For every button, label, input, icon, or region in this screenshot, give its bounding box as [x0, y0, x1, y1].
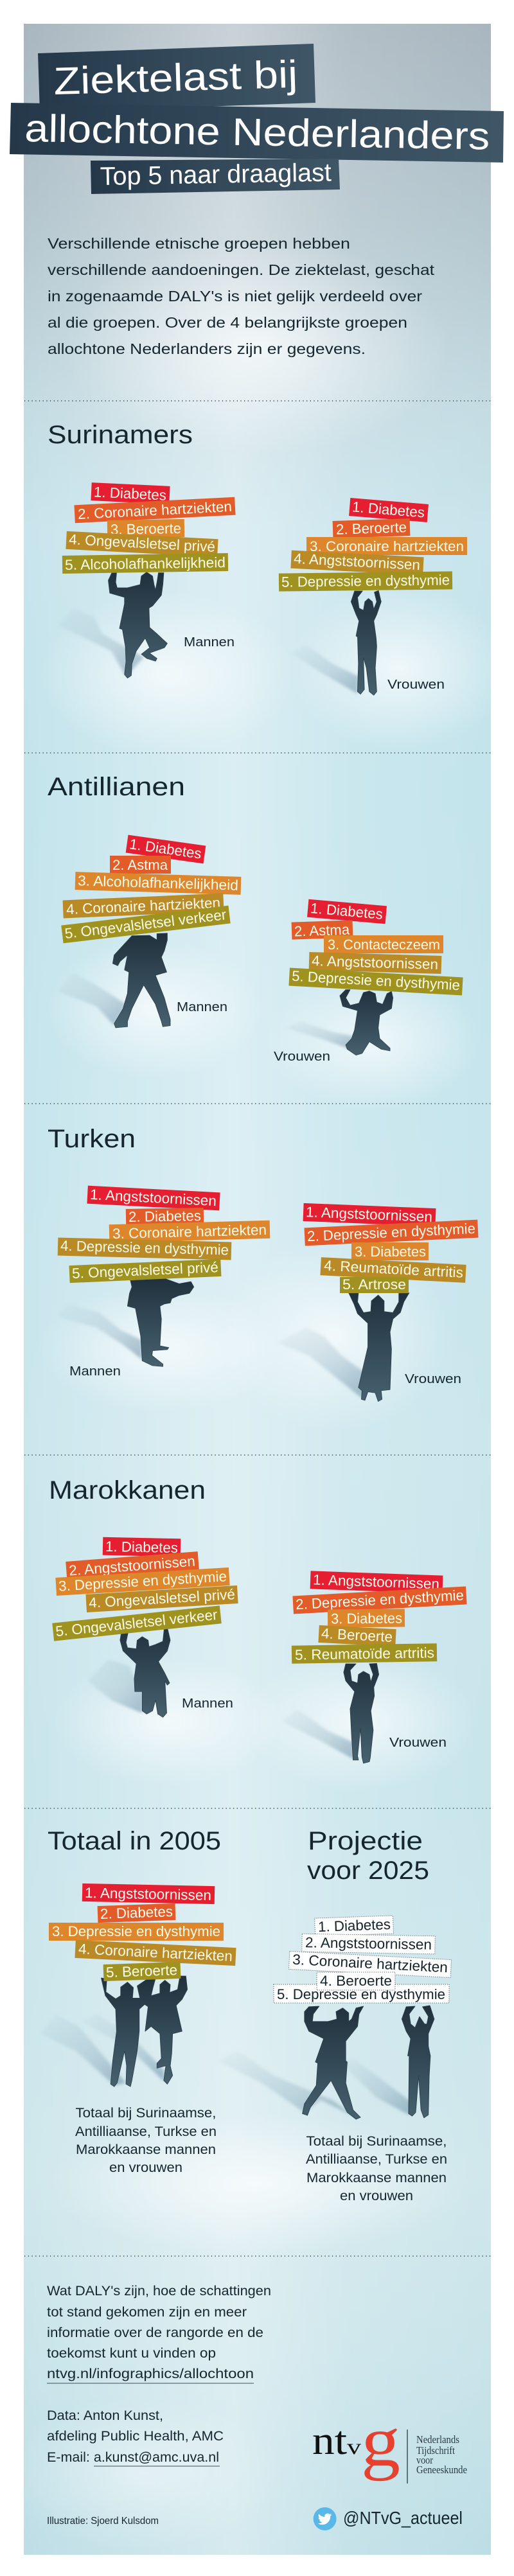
caption: total 2005: en vrouwen: [109, 2160, 182, 2175]
label: 4. Beroerte: 4. Beroerte: [321, 1625, 393, 1645]
panel: Projectie voor 2025: [217, 1827, 452, 2203]
caption: Mannen: Mannen: [69, 1364, 121, 1379]
label: 1. Diabetes: 1. Diabetes: [318, 1916, 391, 1935]
caption: Mannen: Mannen: [184, 635, 235, 649]
figure: man Surinamers: [58, 572, 167, 678]
text: more information: Wat DALY's zijn, hoe de schattingen: [47, 2284, 271, 2298]
label: 4. Depressie en dysthymie: 4. Depressie en dysthymie: [60, 1238, 229, 1258]
label: 2. Diabetes: 2. Diabetes: [100, 1903, 173, 1922]
label: 4. Angststoornissen: 4. Angststoornissen: [312, 953, 438, 973]
heading: Surinamers: Surinamers: [48, 421, 193, 449]
label: 5. Reumatoïde artritis: 5. Reumatoïde artritis: [295, 1645, 434, 1663]
label: 3. Depressie en dysthymie: 3. Depressie en dysthymie: [58, 1568, 227, 1594]
text: data source: afdeling Public Health, AMC: [47, 2429, 224, 2444]
panel: footer: [47, 2284, 467, 2530]
subtitle bar: Top 5 naar draaglast: Top 5 naar draaglast: [100, 159, 332, 191]
figure: woman Turken: [276, 1293, 409, 1402]
label: 1. Angststoornissen: 1. Angststoornissen: [313, 1572, 439, 1592]
caption: projection 2025: en vrouwen: [340, 2189, 413, 2203]
figure: woman Surinamers: [291, 590, 381, 695]
figure: man Turken: [58, 1278, 194, 1366]
label: 3. Coronaire hartziekten: 3. Coronaire hartziekten: [112, 1222, 267, 1242]
panel: Marokkanen: [49, 1476, 467, 1763]
label: 4. Coronaire hartziekten: 4. Coronaire hartziekten: [66, 895, 220, 917]
label: 3. Contacteczeem: 3. Contacteczeem: [328, 937, 440, 953]
caption: projection 2025: [306, 2134, 447, 2203]
label: 5. Artrose: 5. Artrose: [342, 1276, 406, 1292]
caption: total 2005: Totaal bij Surinaamse,: [76, 2106, 216, 2121]
label: 2. Beroerte: 2. Beroerte: [336, 519, 407, 538]
text: more information: ntvg.nl/infographics/allochtoon: [47, 2367, 254, 2381]
logo: ntvg: voor: [416, 2454, 433, 2466]
text: data source: Data: Anton Kunst,: [47, 2408, 163, 2423]
caption: total 2005: [75, 2106, 217, 2175]
label: 3. Depressie en dysthymie: 3. Depressie en dysthymie: [52, 1923, 220, 1939]
title bar: Ziektelast bij: [38, 44, 315, 112]
caption: Vrouwen: Vrouwen: [274, 1049, 330, 1064]
label: 4. Reumatoïde artritis: 4. Reumatoïde artritis: [324, 1257, 464, 1281]
label: 2. Angststoornissen: 2. Angststoornissen: [305, 1934, 432, 1953]
heading: Projectie voor 2025: Projectie: [308, 1827, 423, 1855]
text: data source: [47, 2408, 224, 2466]
text: data source: E-mail: a.kunst@amc.uva.nl: [47, 2450, 219, 2465]
intro text: Verschillende etnische groepen hebben: [48, 235, 350, 252]
figure: man Marokkanen: [87, 1627, 170, 1717]
figure: woman Marokkanen: [282, 1663, 379, 1763]
label: 5. Ongevalsletsel verkeer: 5. Ongevalsletsel verkeer: [55, 1607, 218, 1639]
logo: ntvg: v: [347, 2435, 361, 2459]
label: 3. Beroerte: 3. Beroerte: [111, 520, 181, 538]
text: more information: informatie over de rangorde en de: [47, 2325, 263, 2340]
heading: Marokkanen: Marokkanen: [49, 1476, 206, 1504]
label: 2. Coronaire hartziekten: 2. Coronaire hartziekten: [78, 498, 233, 522]
intro text: [48, 235, 435, 357]
label: 5. Ongevalsletsel verkeer: 5. Ongevalsletsel verkeer: [64, 906, 227, 942]
label: 1. Angststoornissen: 1. Angststoornissen: [85, 1885, 211, 1903]
label: 3. Coronaire hartziekten: 3. Coronaire hartziekten: [292, 1952, 448, 1975]
label: 5. Beroerte: 5. Beroerte: [106, 1962, 177, 1981]
caption: projection 2025: Marokkaanse mannen: [306, 2171, 447, 2185]
intro text: in zogenaamde DALY's is niet gelijk verdeeld over: [48, 288, 422, 304]
heading: Projectie voor 2025: voor 2025: [307, 1857, 429, 1885]
logo: ntvg: Nederlands: [416, 2433, 459, 2446]
label: 5. Depressie en dysthymie: 5. Depressie en dysthymie: [277, 1986, 445, 2002]
text: twitter handle: @NTvG_actueel: [343, 2508, 463, 2528]
label: 2. Depressie en dysthymie: 2. Depressie en dysthymie: [307, 1221, 475, 1244]
label: 4. Angststoornissen: 4. Angststoornissen: [294, 551, 421, 573]
label: 5. Alcoholafhankelijkheid: 5. Alcoholafhankelijkheid: [65, 554, 226, 573]
intro text: allochtone Nederlanders zijn er gegevens.: [48, 340, 366, 357]
label: 1. Diabetes: 1. Diabetes: [105, 1539, 178, 1556]
label: 1. Diabetes: 1. Diabetes: [351, 498, 425, 521]
label: 1. Angststoornissen: 1. Angststoornissen: [90, 1187, 217, 1209]
panel: Surinamers: [48, 421, 467, 695]
label: 5. Depressie en dysthymie: 5. Depressie en dysthymie: [292, 968, 461, 993]
caption: projection 2025: Antilliaanse, Turkse en: [306, 2152, 447, 2167]
caption: Vrouwen: Vrouwen: [387, 677, 445, 692]
logo: ntvg: Tijdschrift: [416, 2444, 455, 2457]
label: 2. Depressie en dysthymie: 2. Depressie en dysthymie: [295, 1587, 464, 1612]
text: more information: tot stand gekomen zijn en meer: [47, 2305, 247, 2320]
caption: Vrouwen: Vrouwen: [389, 1735, 447, 1750]
label: 2. Angststoornissen: 2. Angststoornissen: [68, 1553, 196, 1579]
logo: ntvg: [312, 2402, 467, 2483]
caption: Vrouwen: Vrouwen: [405, 1372, 461, 1386]
label: 3. Diabetes: 3. Diabetes: [355, 1244, 426, 1260]
figure: couple 2025: [217, 2006, 434, 2119]
text: illustration credit: Illustratie: Sjoerd Kulsdom: [47, 2516, 159, 2527]
panel: Turken: [48, 1125, 479, 1402]
figure: man Antillianen: [58, 933, 170, 1028]
heading: Totaal in 2005: Totaal in 2005: [48, 1827, 221, 1855]
intro text: verschillende aandoeningen. De ziektelast, geschat: [48, 261, 435, 278]
icon: twitter: [314, 2507, 337, 2530]
caption: total 2005: Marokkaanse mannen: [76, 2142, 216, 2157]
figure: woman Antillianen: [285, 990, 393, 1055]
label: 4. Ongevalsletsel privé: 4. Ongevalsletsel privé: [88, 1586, 236, 1611]
logo: ntvg: nt: [312, 2419, 347, 2463]
label: 5. Depressie en dysthymie: 5. Depressie en dysthymie: [281, 572, 450, 590]
heading: Projectie voor 2025: [307, 1827, 429, 1885]
label: 1. Diabetes: 1. Diabetes: [93, 484, 167, 504]
caption: Mannen: Mannen: [177, 1000, 227, 1014]
label: 3. Alcoholafhankelijkheid: 3. Alcoholafhankelijkheid: [78, 872, 238, 894]
logo: ntvg: Geneeskunde: [416, 2464, 467, 2476]
label: 5. Ongevalsletsel privé: 5. Ongevalsletsel privé: [71, 1259, 218, 1282]
title block: [10, 44, 504, 194]
panel: Antillianen: [48, 773, 463, 1064]
label: 3. Coronaire hartziekten: 3. Coronaire hartziekten: [310, 538, 464, 554]
label: 2. Diabetes: 2. Diabetes: [128, 1208, 201, 1225]
text: more information: [47, 2284, 271, 2383]
label: 2. Astma: 2. Astma: [294, 921, 350, 939]
label: 1. Diabetes: 1. Diabetes: [128, 836, 202, 862]
label: 4. Coronaire hartziekten: 4. Coronaire hartziekten: [78, 1941, 233, 1964]
label: 4. Beroerte: 4. Beroerte: [320, 1973, 392, 1989]
label: 4. Ongevalsletsel privé: 4. Ongevalsletsel privé: [69, 531, 216, 555]
label: 1. Angststoornissen: 1. Angststoornissen: [306, 1204, 432, 1225]
heading: Antillianen: Antillianen: [48, 773, 185, 801]
panel: Totaal in 2005: [40, 1827, 236, 2175]
text: more information: toekomst kunt u vinden op: [47, 2346, 216, 2361]
logo: ntvg: g: [361, 2402, 400, 2482]
label: 3. Diabetes: 3. Diabetes: [331, 1610, 402, 1627]
figure: couple 2005: [40, 1976, 188, 2086]
title bar: Ziektelast bij: Ziektelast bij: [53, 53, 298, 103]
intro text: al die groepen. Over de 4 belangrijkste groepen: [48, 314, 407, 331]
label: 2. Astma: 2. Astma: [112, 857, 168, 873]
caption: Mannen: Mannen: [182, 1696, 233, 1711]
label: 1. Diabetes: 1. Diabetes: [310, 900, 384, 922]
caption: projection 2025: Totaal bij Surinaamse,: [306, 2134, 447, 2149]
heading: Turken: Turken: [48, 1125, 136, 1153]
title bar: allochtone Nederlanders: allochtone Nederlanders: [24, 107, 490, 158]
caption: total 2005: Antilliaanse, Turkse en: [75, 2124, 217, 2139]
